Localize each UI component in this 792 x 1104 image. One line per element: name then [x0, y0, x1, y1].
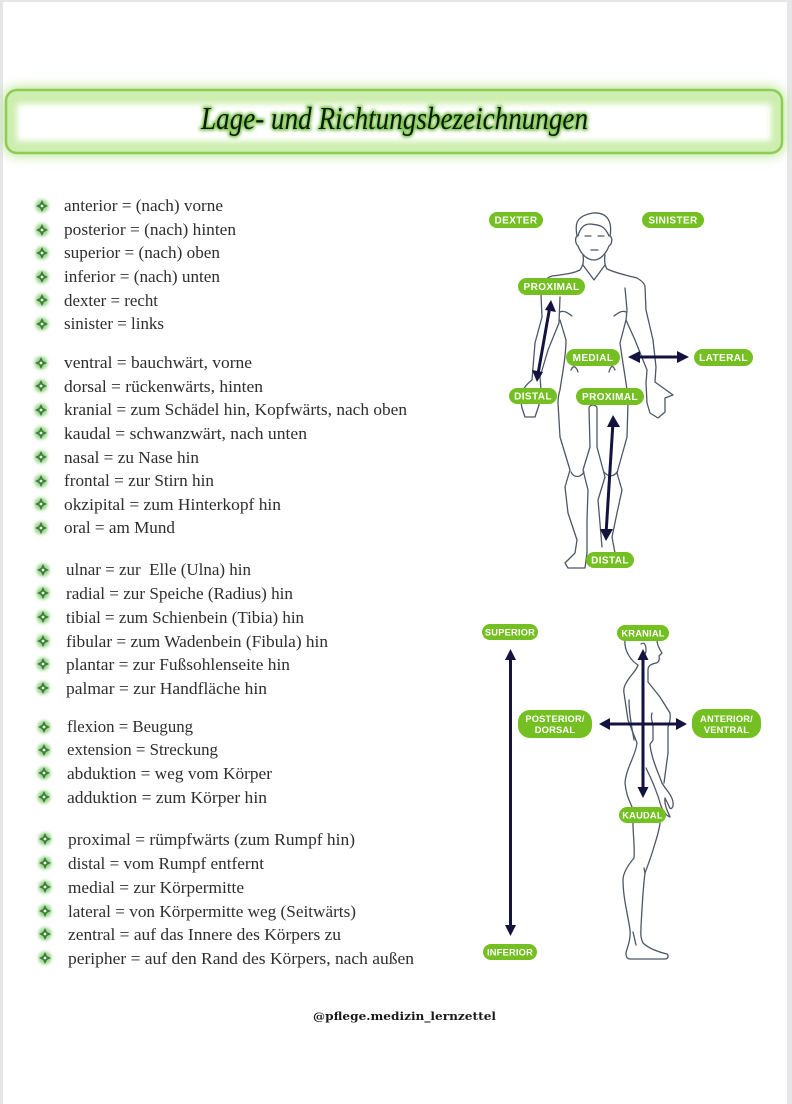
term list group 5: position relative to body: proximal = rümpfwärts (zum Rumpf hin): [68, 830, 355, 849]
arrow: leg proximal to distal: [600, 415, 620, 541]
label: lateral: LATERAL: [699, 353, 748, 364]
term list group 3: limbs: radial = zur Speiche (Radius) hin: [66, 584, 293, 603]
label: distal arm: DISTAL: [514, 392, 552, 402]
label: kaudal: KAUDAL: [622, 810, 663, 820]
label: proximal arm: PROXIMAL: [524, 282, 579, 293]
label: distal leg: DISTAL: [591, 556, 629, 566]
term list group 3: limbs: ulnar = zur Elle (Ulna) hin: [66, 560, 251, 579]
arrow: medial to lateral: [628, 351, 689, 363]
term list group 1: basic directions: dexter = recht: [64, 291, 158, 310]
arrow: superior to inferior: [505, 649, 516, 936]
label: distal arm: [509, 388, 557, 404]
term list group 2: body regions: ventral = bauchwärt, vorne: [64, 353, 252, 372]
label: anterior / ventral: [692, 709, 761, 738]
term list group 2: body regions: kaudal = schwanzwärt, nach unten: [64, 424, 307, 443]
term list group 1: basic directions: anterior = (nach) vorne: [64, 196, 223, 215]
term list group 2: body regions: kranial = zum Schädel hin, Kopfwärts, nach oben: [64, 400, 407, 419]
term list group 5: position relative to body: zentral = auf das Innere des Körpers zu: [68, 925, 341, 944]
front body diagram: [489, 212, 753, 568]
title text: Lage- und Richtungsbezeichnungen: [200, 100, 588, 136]
label: medial: MEDIAL: [573, 353, 613, 364]
term list group 1: basic directions: inferior = (nach) unten: [64, 267, 220, 286]
label: sinister: SINISTER: [648, 216, 698, 226]
term list group 4: movements: [38, 717, 273, 807]
term list group 1: basic directions: superior = (nach) oben: [64, 243, 220, 262]
term list group 3: limbs: plantar = zur Fußsohlenseite hin: [66, 655, 290, 674]
label: anterior / ventral: VENTRAL: [704, 725, 749, 735]
term list group 5: position relative to body: distal = vom Rumpf entfernt: [68, 854, 264, 873]
label: inferior: INFERIOR: [487, 948, 533, 958]
label: proximal leg: PROXIMAL: [582, 392, 638, 403]
footer credit: @pflege.medizin_lernzettel: [313, 1009, 497, 1024]
term list group 4: movements: adduktion = zum Körper hin: [67, 788, 267, 807]
term list group 4: movements: extension = Streckung: [67, 740, 218, 759]
icon: side body outline: [623, 640, 673, 959]
label: inferior: [483, 944, 537, 960]
label: superior: [482, 624, 538, 640]
term list group 2: body regions: frontal = zur Stirn hin: [64, 471, 214, 490]
term list group 5: position relative to body: [38, 830, 414, 968]
label: proximal leg: [576, 388, 644, 405]
term list group 3: limbs: palmar = zur Handfläche hin: [66, 679, 267, 698]
icon: front body outline: [521, 213, 673, 568]
term list group 3: limbs: [36, 560, 328, 698]
side body diagram: [482, 624, 761, 960]
term list group 2: body regions: oral = am Mund: [64, 518, 176, 537]
arrow: arm proximal to distal: [532, 300, 556, 382]
term list group 2: body regions: [34, 353, 407, 537]
label: posterior / dorsal: [518, 710, 592, 738]
label: kaudal: [619, 807, 666, 823]
label: dexter: DEXTER: [495, 216, 538, 226]
arrow: posterior to anterior: [599, 718, 687, 730]
term list group 1: basic directions: posterior = (nach) hinten: [64, 220, 236, 239]
label: posterior / dorsal: POSTERIOR/: [525, 714, 585, 724]
label: sinister: [642, 212, 704, 228]
term list group 3: limbs: fibular = zum Wadenbein (Fibula) hin: [66, 632, 328, 651]
label: distal leg: [586, 552, 634, 568]
term list group 4: movements: abduktion = weg vom Körper: [67, 764, 273, 783]
label: proximal arm: [518, 278, 585, 295]
label: dexter: [489, 212, 543, 228]
term list group 2: body regions: dorsal = rückenwärts, hinten: [64, 377, 263, 396]
term list group 5: position relative to body: peripher = auf den Rand des Körpers, nach außen: [68, 949, 414, 968]
label: kranial: KRANIAL: [621, 628, 665, 638]
label: lateral: [694, 349, 753, 366]
title banner: [4, 88, 784, 155]
label: posterior / dorsal: DORSAL: [535, 725, 575, 735]
term list group 5: position relative to body: lateral = von Körpermitte weg (Seitwärts): [68, 902, 356, 921]
label: medial: [566, 349, 620, 366]
label: kranial: [617, 625, 669, 641]
arrow: kranial to kaudal: [638, 649, 648, 798]
term list group 1: basic directions: sinister = links: [64, 314, 164, 333]
term list group 2: body regions: okzipital = zum Hinterkopf hin: [64, 495, 281, 514]
term list group 1: basic directions: [36, 196, 236, 333]
term list group 4: movements: flexion = Beugung: [67, 717, 193, 736]
term list group 3: limbs: tibial = zum Schienbein (Tibia) hin: [66, 608, 304, 627]
label: superior: SUPERIOR: [485, 628, 535, 638]
term list group 5: position relative to body: medial = zur Körpermitte: [68, 878, 244, 897]
title text: Lage- und Richtungsbezeichnungen: [200, 100, 588, 136]
term list group 2: body regions: nasal = zu Nase hin: [64, 448, 199, 467]
label: anterior / ventral: ANTERIOR/: [700, 714, 753, 724]
